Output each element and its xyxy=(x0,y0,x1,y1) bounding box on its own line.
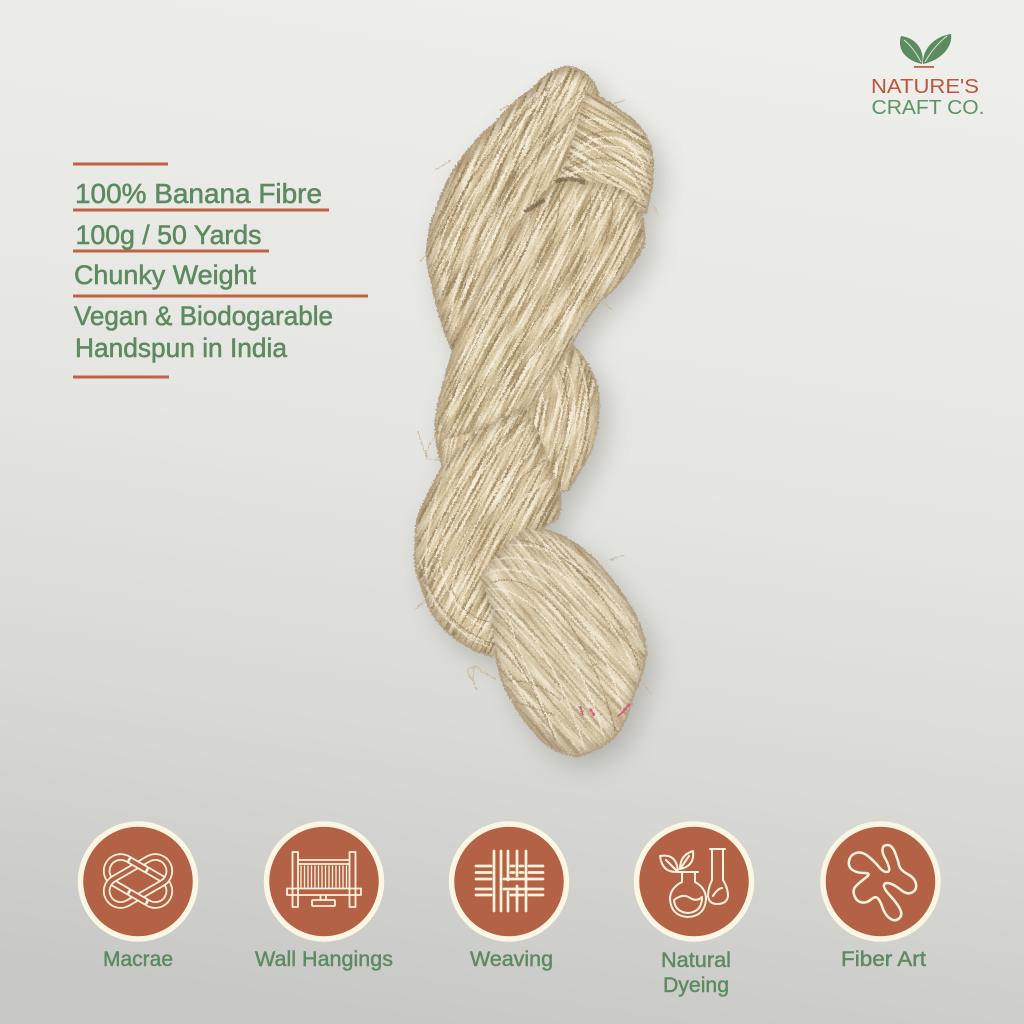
use: weaving xyxy=(452,824,566,971)
yarn shadow xyxy=(425,79,661,766)
spec: vegan: Vegan & Biodogarable xyxy=(74,301,333,331)
spec: fibre content: 100% Banana Fibre xyxy=(75,178,322,209)
spec: weight and length: 100g / 50 Yards xyxy=(76,220,262,250)
label line 2: Dyeing xyxy=(663,974,729,997)
logo name line 1: NATURE'S xyxy=(871,75,979,98)
icon: organic fibre outline xyxy=(823,824,938,939)
icon: loom xyxy=(266,824,382,939)
underline: weight and length xyxy=(73,250,269,252)
spec list xyxy=(73,162,368,378)
spec: origin: Handspun in India xyxy=(75,333,288,363)
logo xyxy=(871,34,984,119)
use: fiber art xyxy=(823,824,938,971)
use: wall hangings xyxy=(255,824,393,971)
label line 1: Natural xyxy=(661,949,731,972)
label: Fiber Art xyxy=(841,948,926,971)
label: Weaving xyxy=(470,948,553,971)
logo name line 2: CRAFT CO. xyxy=(872,96,984,119)
icon: plant, flask and test tube xyxy=(636,824,752,939)
accent rule bottom xyxy=(73,376,169,378)
accent rule top xyxy=(73,162,168,166)
spec: yarn weight: Chunky Weight xyxy=(74,260,256,290)
underline: fibre content xyxy=(73,208,329,212)
divider rule xyxy=(73,294,368,298)
label: Wall Hangings xyxy=(255,948,393,971)
icon: woven grid xyxy=(452,824,566,939)
use: natural dyeing xyxy=(636,824,752,997)
label: Macrae xyxy=(103,948,173,971)
use: macrame xyxy=(80,824,196,971)
icon: leaves xyxy=(900,34,951,68)
banana fibre yarn skein xyxy=(412,66,659,758)
icon: macrame knot xyxy=(80,824,196,939)
